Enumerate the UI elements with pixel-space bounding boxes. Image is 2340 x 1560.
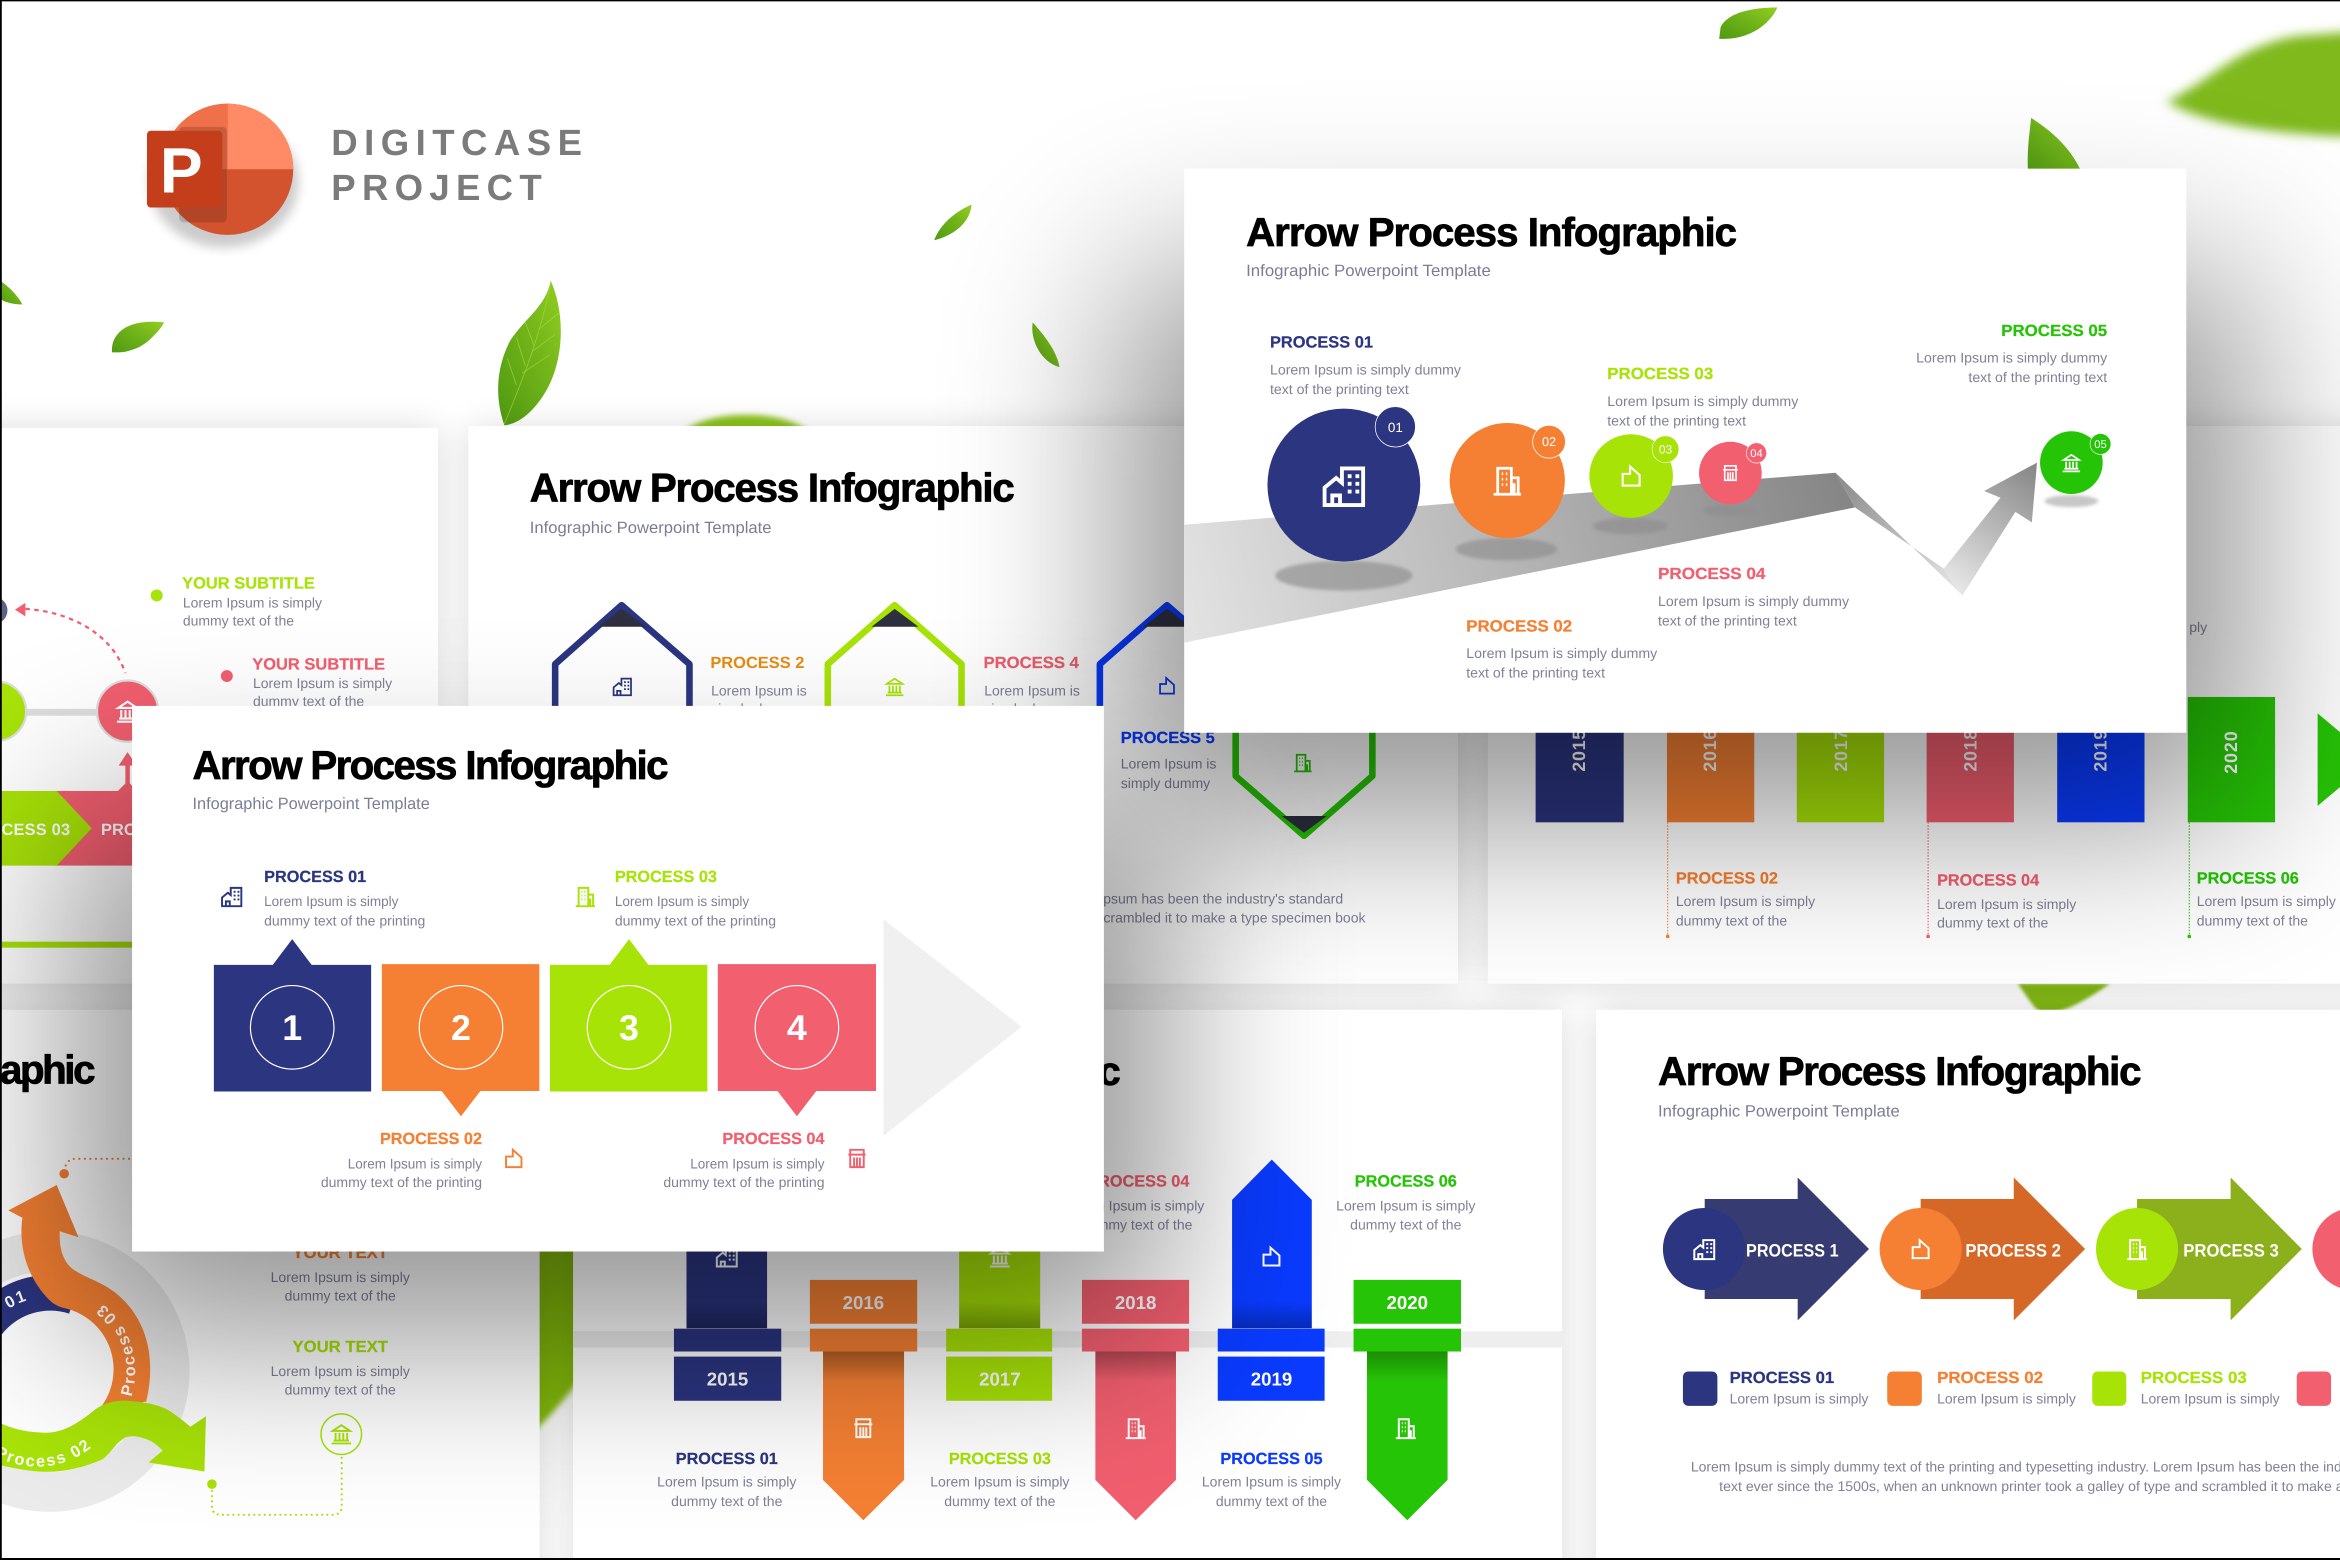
label process 01 <box>222 869 425 928</box>
leaf: blurred top right <box>2167 31 2340 137</box>
logo disc <box>162 104 293 235</box>
label process 2 <box>710 654 807 716</box>
brand name <box>331 124 582 209</box>
slide surface <box>1184 169 2186 733</box>
label process 05: text of the printing text <box>1968 369 2108 385</box>
square 2: 2 <box>451 1009 471 1049</box>
slide surface <box>132 706 1104 1252</box>
arrow 2 <box>1880 1177 2085 1320</box>
square 3: 3 <box>619 1009 639 1049</box>
label process 05: Lorem Ipsum is simply dummy <box>1916 349 2108 366</box>
label process 01: text of the printing text <box>1270 381 1409 397</box>
label process 01: dummy text of the <box>671 1492 782 1509</box>
lime arrow <box>0 1401 206 1472</box>
outer ring <box>0 1251 169 1492</box>
pin 2016: 2016 <box>843 1292 884 1313</box>
subtitle block lime: dummy text of the <box>183 612 294 628</box>
pin 2015: 2015 <box>707 1369 748 1390</box>
hexagon navy <box>555 605 689 709</box>
logo shadow <box>149 116 298 248</box>
label process 05: PROCESS 05 <box>1220 1451 1323 1469</box>
lime dotted connector <box>207 1457 342 1515</box>
label process 4: PROCESS 4 <box>983 654 1079 672</box>
subtitle block red: Lorem Ipsum is simply <box>253 675 393 691</box>
shadow: front slides <box>70 269 2247 1340</box>
logo letter: P <box>160 136 203 207</box>
small red up arrow <box>118 752 137 791</box>
subtitle block red: YOUR SUBTITLE <box>252 656 385 674</box>
label process 03: PROCESS 03 <box>1607 366 1713 384</box>
label process 05 <box>1916 322 2108 385</box>
pin 2020 <box>1354 1280 1461 1520</box>
label process 02 <box>1666 822 1816 938</box>
leaf: centre top <box>934 204 972 240</box>
leaf: top <box>1719 7 1777 39</box>
label process 02: PROCESS 02 <box>1466 618 1572 636</box>
square 4: 4 <box>787 1009 808 1049</box>
label process 04: PROCESS 04 <box>722 1130 825 1148</box>
label process 03: dummy text of the <box>944 1492 1055 1509</box>
label process 05 <box>1202 1451 1342 1509</box>
leaf: blurred between lower slides <box>522 1246 585 1440</box>
label process 01: Lorem Ipsum is simply <box>657 1473 797 1489</box>
label process 04: PROCESS 04 <box>1658 566 1765 584</box>
label process 03 <box>576 869 776 928</box>
bar 2015 <box>1536 697 1624 822</box>
subtitle: Infographic Powerpoint Template <box>1246 263 1491 281</box>
pin 2019 <box>1218 1160 1325 1401</box>
hexagon green <box>1236 728 1372 836</box>
bar 2019: 2019 <box>2090 729 2111 772</box>
circle 04: 04 <box>1750 447 1763 460</box>
legend 01: Lorem Ipsum is simply <box>1730 1390 1869 1407</box>
your text orange: dummy text of the <box>285 1287 396 1304</box>
label process 04 <box>663 1130 866 1190</box>
ring highlight <box>0 1272 148 1471</box>
circle 02 <box>1450 423 1565 560</box>
panel: back slide D, circular arrows <box>0 1000 552 1558</box>
panel surface <box>0 428 438 984</box>
square 1 <box>214 939 371 1092</box>
orange dotted connector <box>59 1159 137 1179</box>
panel surface <box>0 1010 540 1560</box>
label process 06: PROCESS 06 <box>2197 870 2299 888</box>
logo: PowerPoint <box>147 104 298 248</box>
your text lime <box>271 1339 410 1398</box>
label process 02: Lorem Ipsum is simply dummy <box>1466 645 1658 661</box>
panel: back slide C, vertical year bars <box>1488 426 2340 984</box>
circle 04 <box>1699 442 1767 516</box>
square 1: 1 <box>282 1009 302 1049</box>
bar 2018 <box>1927 697 2014 822</box>
square 4 <box>718 964 876 1116</box>
dashed arc arrow <box>15 603 125 673</box>
your text orange: Lorem Ipsum is simply <box>271 1269 410 1285</box>
process band: PRO <box>101 822 137 839</box>
label process 4: Lorem Ipsum is <box>984 682 1080 698</box>
label process 06: dummy text of the <box>2197 912 2308 928</box>
panel surface <box>1596 1010 2340 1560</box>
label process 01: Lorem Ipsum is simply <box>264 892 399 909</box>
legend 02: PROCESS 02 <box>1937 1369 2043 1387</box>
pin 2016 <box>810 1280 917 1520</box>
bar 2019 <box>2057 697 2145 822</box>
label process 2: simply dummy <box>711 700 801 716</box>
stray text: ply <box>2189 619 2208 635</box>
panel: front slide, road arrow process <box>1184 169 2186 733</box>
arrow 4 circle <box>2312 1208 2340 1290</box>
label process 5: PROCESS 5 <box>1121 730 1215 748</box>
title end: c <box>1098 1049 1121 1094</box>
pin 2017 <box>946 1160 1052 1401</box>
circle 05 <box>2040 431 2111 507</box>
legend 02 <box>1887 1369 2076 1407</box>
hexagon blue <box>1100 605 1234 709</box>
arrow 3: PROCESS 3 <box>2183 1240 2279 1261</box>
background arrow <box>883 919 1022 1136</box>
panel shadow <box>0 428 439 983</box>
label process 01: dummy text of the printing <box>264 912 425 928</box>
label process 06: PROCESS 06 <box>1355 1173 1457 1191</box>
bar 2017 <box>1797 697 1884 822</box>
label process 03: dummy text of the printing <box>615 912 776 928</box>
legend 03: Lorem Ipsum is simply <box>2141 1390 2280 1407</box>
title end: aphic <box>0 1048 96 1092</box>
your text lime: Lorem Ipsum is simply <box>271 1363 410 1379</box>
label process 06 <box>2187 822 2336 938</box>
label process 04: dummy text of the <box>1937 914 2048 931</box>
arrow 1: PROCESS 1 <box>1746 1240 1839 1261</box>
label process 06: dummy text of the <box>1350 1216 1461 1233</box>
bar 2020 <box>2188 697 2275 822</box>
logo inner shade <box>179 127 227 222</box>
lime rule <box>0 942 137 948</box>
brand line one: DIGITCASE <box>331 124 582 164</box>
circled icon <box>321 1414 362 1454</box>
panel: back slide F, arrow chain <box>1595 1010 2340 1560</box>
label process 03: text of the printing text <box>1607 412 1747 428</box>
bar 2017: 2017 <box>1830 729 1851 772</box>
shadow of right front slide <box>1122 269 2247 822</box>
label process 04: Lorem Ipsum is simply <box>1937 895 2077 912</box>
label process 04: Lorem Ipsum is simply <box>690 1155 825 1172</box>
subtitle block red <box>221 656 393 709</box>
label process 05: PROCESS 05 <box>2001 322 2107 340</box>
subtitle: Infographic Powerpoint Template <box>530 519 772 537</box>
label process 4 <box>983 654 1080 716</box>
leaf: blurred lower gap <box>2018 983 2110 1015</box>
title: Arrow Process Infographic <box>530 466 1015 510</box>
label process 03: Lorem Ipsum is simply dummy <box>1607 392 1799 409</box>
panel surface <box>573 1010 1562 1560</box>
label process 04: Lorem Ipsum is simply dummy <box>1658 592 1849 609</box>
your text lime: YOUR TEXT <box>292 1339 389 1357</box>
label process 03: Lorem Ipsum is simply <box>615 892 750 909</box>
leaf: small left <box>112 322 164 352</box>
label process 06 <box>1336 1173 1476 1233</box>
label process 03: Lorem Ipsum is simply <box>930 1473 1070 1489</box>
title: Arrow Process Infographic <box>1246 210 1737 255</box>
legend 03 <box>2092 1369 2280 1407</box>
logo square <box>147 131 222 207</box>
circle 01: 01 <box>1388 420 1403 435</box>
bar 2018: 2018 <box>1960 729 1981 772</box>
label process 04 <box>1065 1173 1205 1233</box>
label process 06: Lorem Ipsum is simply <box>1336 1197 1476 1213</box>
circular arrow diagram <box>2 1185 206 1512</box>
label process 02: PROCESS 02 <box>1676 870 1778 888</box>
label process 2: PROCESS 2 <box>710 654 804 672</box>
label process 01 <box>657 1451 797 1509</box>
label process 05: Lorem Ipsum is simply <box>1202 1473 1342 1489</box>
label process 4: simply dummy <box>984 700 1074 716</box>
legend 01 <box>1683 1369 1869 1407</box>
hexagon lime <box>828 605 962 709</box>
label process 02 <box>321 1130 521 1190</box>
label process 2: Lorem Ipsum is <box>711 682 807 698</box>
green arrow tip <box>2318 713 2340 806</box>
label process 04 <box>1658 566 1849 628</box>
label process 01: PROCESS 01 <box>1270 334 1373 352</box>
label process 04: dummy text of the <box>1081 1216 1192 1233</box>
label process 02: dummy text of the printing <box>321 1174 482 1190</box>
shadow of left front slide <box>70 806 1166 1340</box>
subtitle: Infographic Powerpoint Template <box>193 795 430 813</box>
leaf: blurred behind middle slide <box>679 415 813 469</box>
label process 5: Lorem Ipsum is <box>1121 755 1217 772</box>
pin 2019: 2019 <box>1251 1369 1292 1390</box>
panel: back slide A, subtitles timeline <box>0 428 439 984</box>
paragraph <box>1691 1458 2340 1494</box>
label process 04 <box>1926 822 2077 938</box>
label process 04: dummy text of the printing <box>663 1174 825 1190</box>
orange arrow <box>8 1185 150 1415</box>
road arrow <box>1184 463 2037 643</box>
label process 03: PROCESS 03 <box>949 1451 1051 1469</box>
paragraph <box>1056 890 1366 925</box>
label process 02 <box>1466 618 1658 681</box>
panel: back slide E, timeline pins <box>573 1010 1562 1560</box>
pin 2015 <box>674 1160 781 1401</box>
panel shadow <box>573 1010 1562 1560</box>
centre band <box>573 1331 1562 1348</box>
panel surface <box>468 426 1458 984</box>
pin 2018 <box>1082 1280 1189 1520</box>
your text orange: YOUR TEXT <box>292 1245 389 1263</box>
title: Arrow Process Infographic <box>193 743 669 788</box>
leaf: behind top slide <box>2028 118 2083 176</box>
leaf: left edge <box>0 281 22 304</box>
label process 04: Lorem Ipsum is simply <box>1065 1197 1205 1213</box>
your text orange <box>271 1245 410 1304</box>
square 3 <box>550 939 707 1092</box>
label process 01: PROCESS 01 <box>676 1451 778 1469</box>
pin 2017: 2017 <box>979 1369 1021 1390</box>
label process 02: PROCESS 02 <box>380 1130 482 1148</box>
panel: back slide B, hexagons <box>468 426 1458 984</box>
label process 02: Lorem Ipsum is simply <box>1676 892 1816 909</box>
label process 02: Lorem Ipsum is simply <box>348 1155 482 1172</box>
ring label 03: Process 03 <box>97 1306 136 1396</box>
pin 2020: 2020 <box>1387 1292 1428 1313</box>
label process 03: PROCESS 03 <box>615 869 717 886</box>
bar 2016 <box>1667 697 1754 822</box>
legend 01: PROCESS 01 <box>1730 1369 1834 1387</box>
label process 04: PROCESS 04 <box>1937 872 2039 890</box>
subtitle block lime: YOUR SUBTITLE <box>182 575 315 593</box>
label process 03 <box>1607 366 1799 428</box>
process band: CESS 03 <box>1 822 70 839</box>
legend 02: Lorem Ipsum is simply <box>1937 1390 2076 1407</box>
panel shadow <box>469 428 1458 983</box>
circle 02: 02 <box>1542 434 1557 449</box>
label process 03 <box>930 1451 1070 1509</box>
connector and nodes <box>0 597 158 742</box>
leaf: large centre <box>498 281 561 425</box>
label process 02: dummy text of the <box>1676 912 1787 928</box>
label process 06: Lorem Ipsum is simply <box>2197 892 2336 909</box>
label process 01: Lorem Ipsum is simply dummy <box>1270 361 1461 378</box>
subtitle block lime <box>151 575 322 628</box>
label process 05: dummy text of the <box>1216 1492 1327 1509</box>
label process 01 <box>1270 334 1461 397</box>
bar 2015: 2015 <box>1568 729 1589 772</box>
label process 01: PROCESS 01 <box>264 869 366 886</box>
circle 05: 05 <box>2094 438 2107 451</box>
subtitle: Infographic Powerpoint Template <box>1658 1103 1900 1121</box>
circle 03 <box>1589 434 1679 534</box>
panel: front slide, numbered squares <box>132 706 1104 1252</box>
title: Arrow Process Infographic <box>1658 1049 2142 1094</box>
paragraph: and scrambled it to make a type specimen book <box>1069 909 1366 925</box>
panel shadow <box>1595 1010 2340 1560</box>
subtitle block red: dummy text of the <box>253 692 364 709</box>
paragraph: Lorem Ipsum has been the industry's standard <box>1056 890 1343 907</box>
panel shadow <box>1488 428 2340 983</box>
your text lime: dummy text of the <box>285 1381 396 1398</box>
panel shadow <box>0 1010 540 1560</box>
label process 04: text of the printing text <box>1658 612 1797 628</box>
pin 2018: 2018 <box>1115 1292 1156 1313</box>
label process 02: text of the printing text <box>1466 664 1606 681</box>
label process 5 <box>1121 730 1217 791</box>
arrow 3 <box>2096 1177 2302 1320</box>
label process 04: PROCESS 04 <box>1087 1173 1189 1191</box>
subtitle block lime: Lorem Ipsum is simply <box>183 594 322 610</box>
arrow 2: PROCESS 2 <box>1965 1240 2061 1261</box>
navy arc <box>0 1293 75 1380</box>
panel surface <box>1488 426 2340 984</box>
bar 2020: 2020 <box>2221 731 2242 774</box>
square 2 <box>382 964 539 1116</box>
legend 04 swatch <box>2297 1372 2331 1406</box>
process band <box>0 791 143 866</box>
label process 5: simply dummy <box>1121 775 1211 791</box>
leaf: centre thin <box>1032 322 1060 367</box>
legend 03: PROCESS 03 <box>2141 1369 2247 1387</box>
brand line two: PROJECT <box>331 169 542 209</box>
circle 01 <box>1267 407 1420 591</box>
arrow 1 <box>1663 1177 1869 1320</box>
circle 03: 03 <box>1659 443 1673 457</box>
bar 2016: 2016 <box>1700 729 1721 772</box>
